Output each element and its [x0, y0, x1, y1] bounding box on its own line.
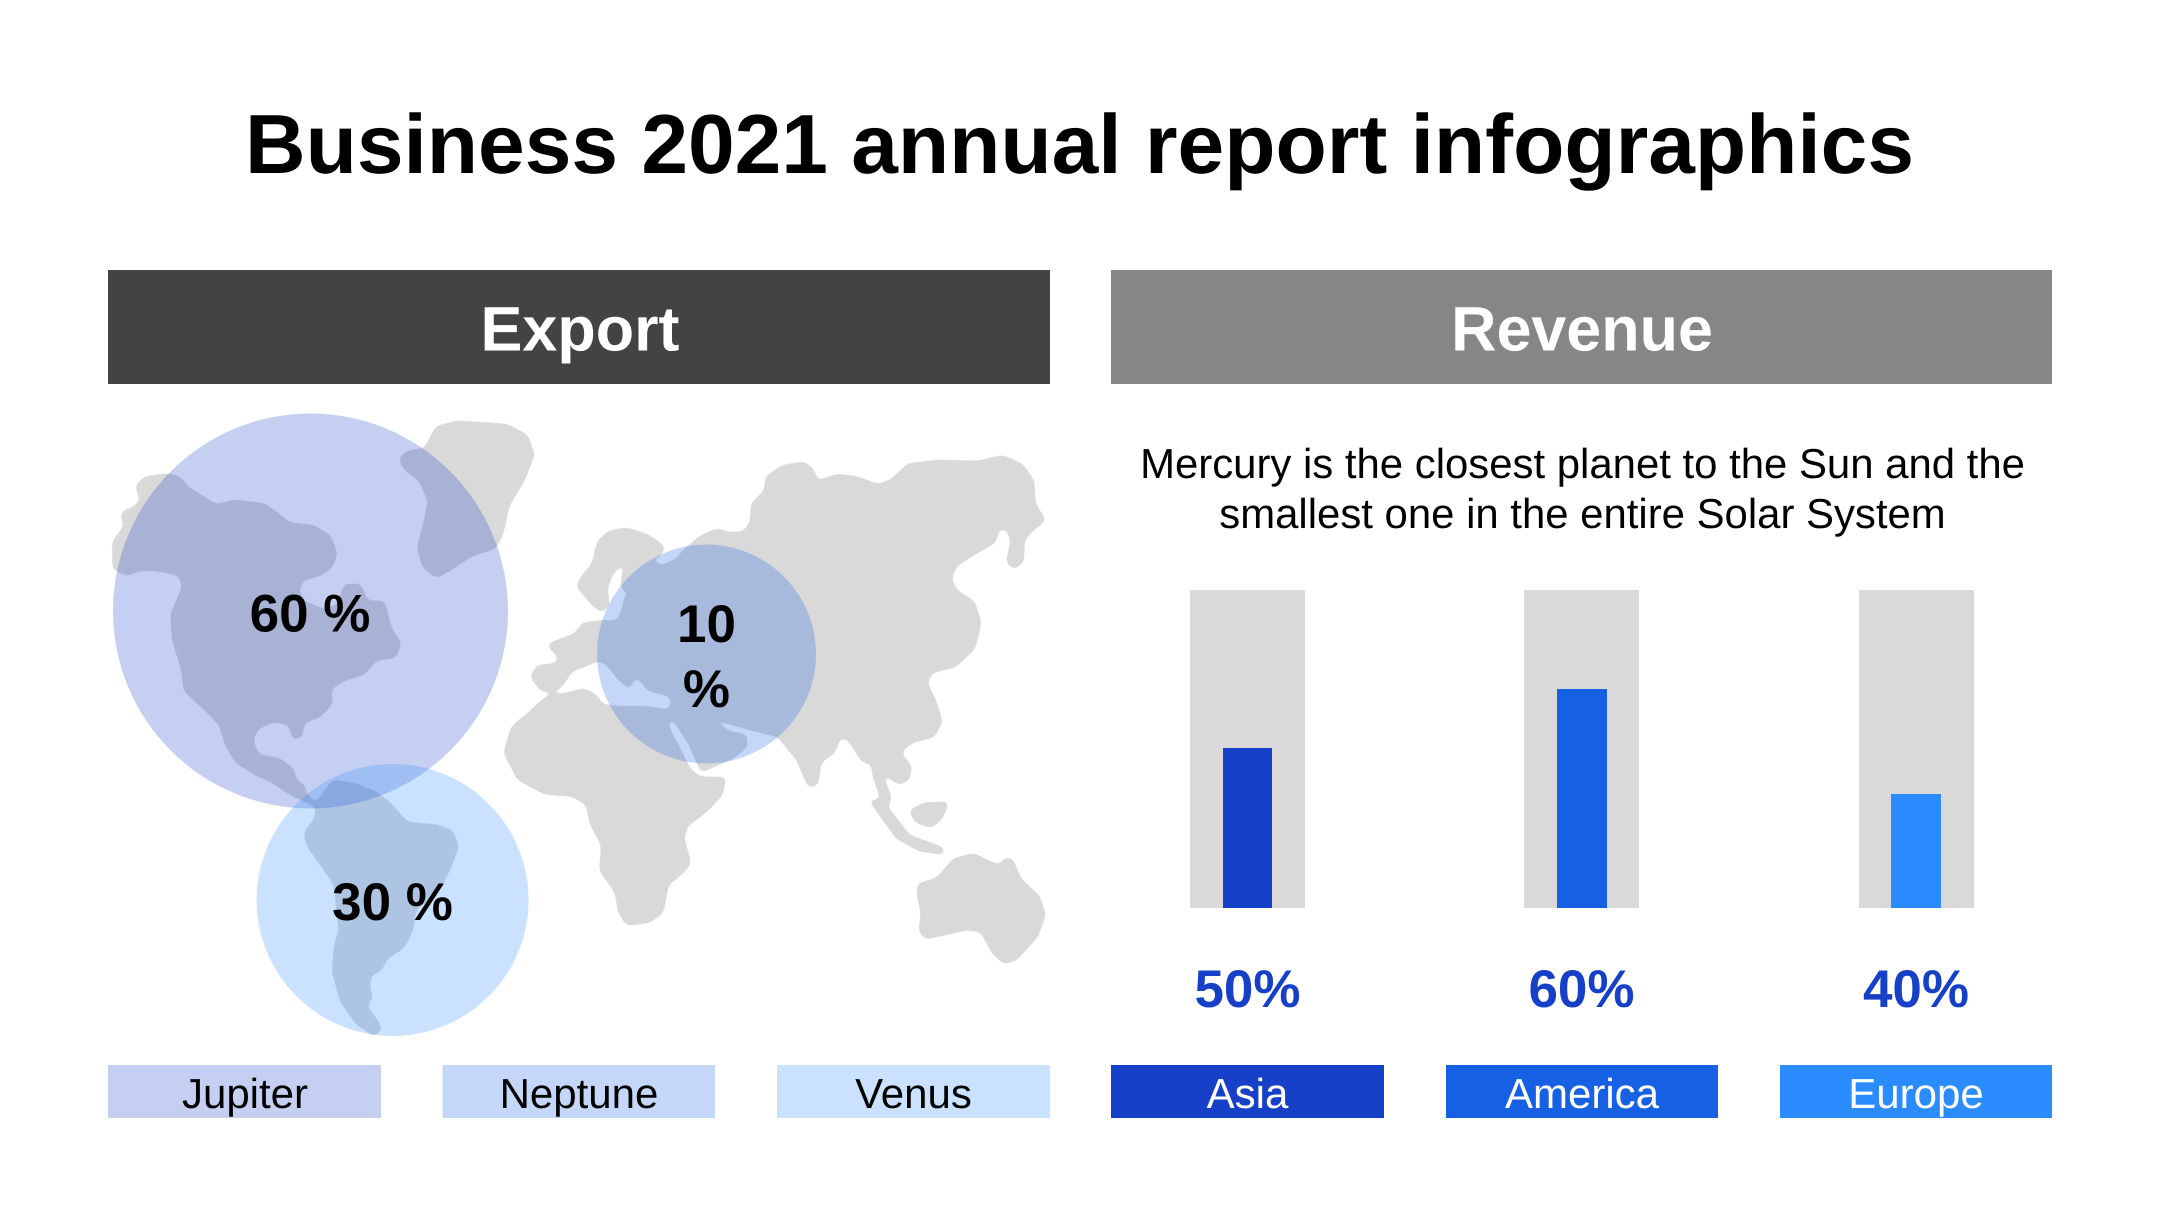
legend: america — [1446, 1065, 1718, 1118]
bubble: 60 % jupiter: 60 % — [250, 584, 370, 644]
map: africa — [505, 690, 725, 924]
bubble: 30 % venus: 30 % — [332, 873, 453, 932]
bubble: 30 % venus — [257, 764, 529, 1036]
map: eurasia — [532, 456, 1044, 804]
legend: america: America — [1505, 1070, 1660, 1117]
revenue description — [1140, 440, 2025, 537]
revenue description: smallest one in the entire Solar System — [1219, 490, 1946, 537]
bar: asia 50% — [1190, 590, 1305, 908]
legend: asia — [1111, 1065, 1384, 1118]
map: sumatra and java — [870, 800, 943, 853]
revenue description: Mercury is the closest planet to the Sun and the — [1140, 440, 2025, 487]
export heading: Export — [481, 294, 680, 364]
legend: jupiter — [108, 1065, 381, 1118]
world map — [113, 422, 1044, 1035]
map: north america — [113, 475, 400, 806]
bubble: 10 % neptune: % — [683, 660, 730, 719]
export heading — [108, 270, 1050, 384]
value: 50%: 50% — [1194, 960, 1301, 1019]
title: Business 2021 annual report infographics — [245, 97, 1914, 191]
bubble: 10 % neptune — [597, 544, 816, 764]
legend: neptune: Neptune — [500, 1070, 658, 1117]
value: 60%: 60% — [1528, 960, 1635, 1019]
map: eastern hemisphere — [505, 456, 1044, 963]
revenue heading: Revenue — [1451, 294, 1713, 364]
legend: europe: Europe — [1848, 1070, 1984, 1117]
revenue heading — [1111, 270, 2052, 384]
map: borneo — [911, 803, 948, 826]
legend: venus — [777, 1065, 1050, 1118]
legend: jupiter: Jupiter — [182, 1070, 308, 1117]
bar: europe 40% — [1859, 590, 1974, 908]
map: greenland — [401, 422, 533, 577]
legend: neptune — [442, 1065, 715, 1118]
legend: venus: Venus — [855, 1070, 972, 1117]
map: australia — [918, 855, 1044, 963]
panel: revenue — [1111, 270, 2052, 1118]
value: 40%: 40% — [1863, 960, 1969, 1019]
bar: america 60% — [1524, 590, 1639, 908]
panel: export — [108, 270, 1050, 1118]
bubble: 10 % neptune: 10 — [677, 595, 736, 654]
legend: europe — [1780, 1065, 2052, 1118]
bubble: 60 % jupiter — [113, 414, 508, 808]
map: americas and greenland — [113, 422, 533, 1035]
legend: asia: Asia — [1207, 1070, 1289, 1117]
map: south america — [305, 781, 458, 1035]
